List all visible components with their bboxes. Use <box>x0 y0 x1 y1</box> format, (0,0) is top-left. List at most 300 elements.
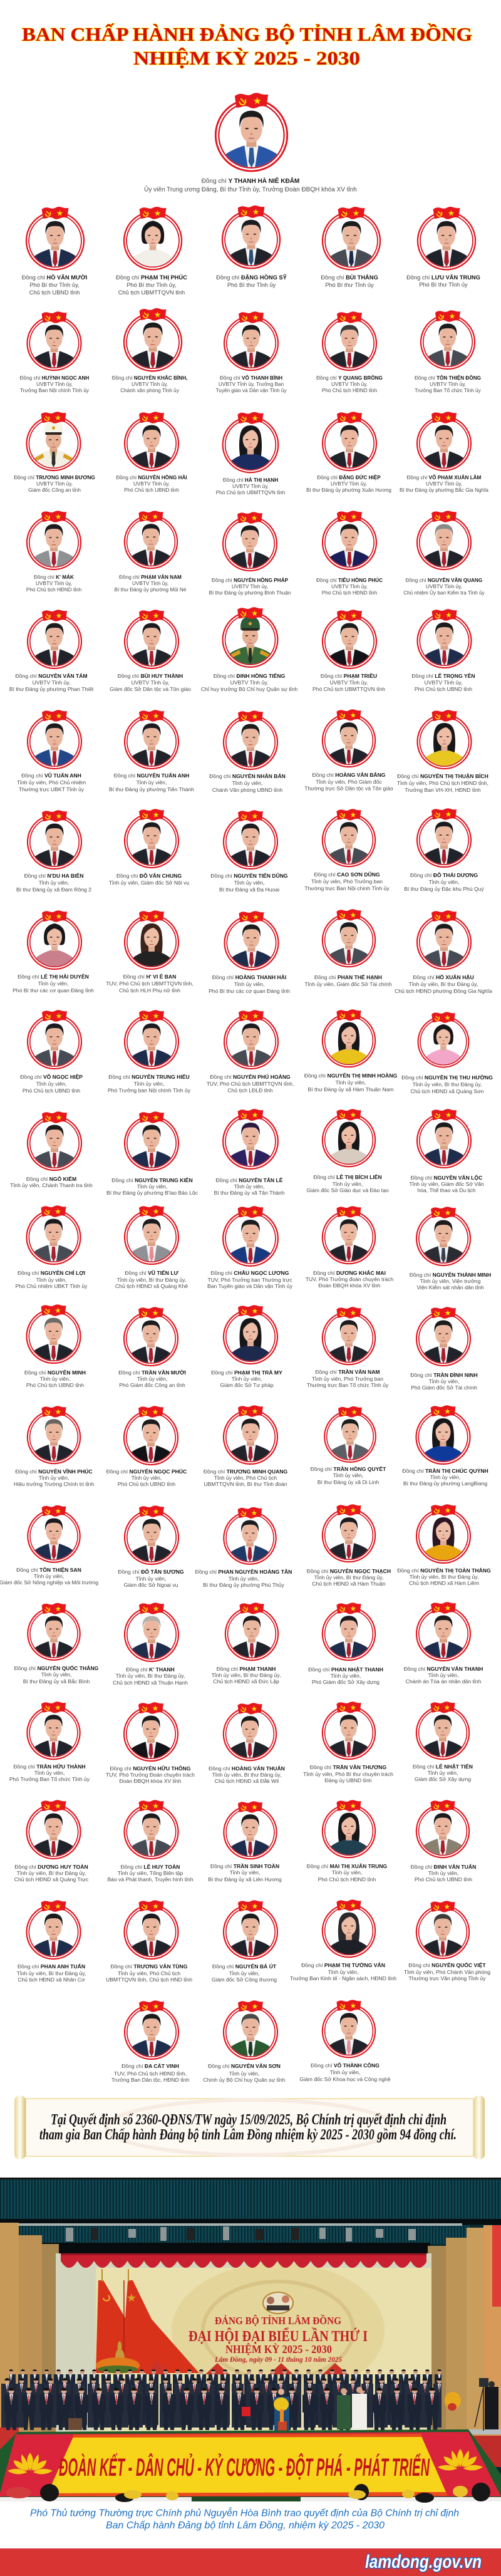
member: Đinh Văn Tuấn: Phó Chủ tịch UBND tỉnh <box>415 1876 472 1883</box>
member: Nguyễn Trung Kiên: Tỉnh ủy viên, <box>137 1183 167 1190</box>
member: Tiêu Hồng Phúc: UVBTV Tỉnh ủy, <box>331 584 368 589</box>
member: Tôn Thiện San: Tỉnh ủy viên, <box>34 1573 64 1579</box>
member: Lưu Văn Trung: Đồng chí LƯU VĂN TRUNG <box>406 274 480 281</box>
member: Võ Thành Công: Tỉnh ủy viên, <box>330 2069 360 2075</box>
member: K' Mák: UVBTV Tỉnh ủy, <box>36 581 72 586</box>
member: Phan Anh Tuấn: Đồng chí PHAN ANH TUẤN <box>18 1963 85 1970</box>
member: Nguyễn Hồng Pháp: Đồng chí NGUYỄN HỒNG PHÁP <box>212 578 288 583</box>
member: Lưu Văn Trung <box>406 207 480 288</box>
member: Dương Khắc Mai: Đồng chí DƯƠNG KHẮC MAI <box>313 1270 386 1276</box>
member: Nguyễn Ngọc Phúc: Tỉnh ủy viên, <box>132 1475 162 1481</box>
member: Nguyễn Chí Lợi: Đồng chí NGUYỄN CHÍ LỢI <box>18 1270 85 1276</box>
member: Cao Sơn Dũng: Đồng chí CAO SƠN DŨNG <box>314 871 380 878</box>
member: Nguyễn Văn Sơn <box>204 2000 286 2083</box>
member: Đỗ Thái Dương: Bí thư Đảng ủy Đặc khu Phú Quý <box>404 886 484 892</box>
member: K' Thanh <box>113 1602 188 1686</box>
member: Võ Thanh Bình: Đồng chí VÕ THANH BÌNH <box>220 375 282 381</box>
member: Nguyễn Hồng Pháp: UVBTV Tỉnh ủy, <box>232 584 268 589</box>
member: Nguyễn Thành Minh: Đồng chí NGUYỄN THÀNH MINH <box>410 1272 491 1278</box>
member: Võ Phạm Xuân Lâm: Đồng chí VÕ PHẠM XUÂN LÂM <box>407 475 481 480</box>
member: Nguyễn Bá Út: Tỉnh ủy viên, <box>229 1970 259 1976</box>
member: Hồ Xuân Hậu <box>395 910 492 994</box>
member: Hồ Văn Mười: Đồng chí HỒ VĂN MƯỜI <box>22 274 87 281</box>
member: Dương Huy Toàn <box>14 1800 89 1883</box>
member: Võ Ngọc Hiệp: Tỉnh ủy viên, <box>36 1081 66 1087</box>
member: Phạm Triều: UVBTV Tỉnh ủy, <box>330 679 368 685</box>
member: Nguyễn Văn Quang <box>403 511 485 596</box>
row: members A <box>20 308 482 393</box>
member: Hồ Văn Mười <box>22 207 87 296</box>
member: Nguyễn Trung Hiếu: Phó Trưởng ban Nội chính Tỉnh ủy <box>108 1088 191 1094</box>
member: Nguyễn Trung Hiếu: Tỉnh ủy viên, <box>134 1081 164 1087</box>
emblem: Marx Lenin portrait <box>263 2292 293 2314</box>
member: Nguyễn Minh: Đồng chí NGUYỄN MINH <box>24 1369 86 1376</box>
member: Nguyễn Văn Tám: Đồng chí NGUYỄN VĂN TÁM <box>15 673 88 679</box>
member: Phan Nhật Thanh: Phó Giám đốc Sở Xây dựng <box>312 1679 380 1685</box>
member: Ngô Kiểm <box>10 1111 93 1188</box>
member: Trần Sinh Toàn <box>208 1801 282 1883</box>
row: members L <box>14 1405 488 1487</box>
bust and flowers <box>96 2341 140 2374</box>
member: Trần Đình Ninh: Phó Giám đốc Sở Tài chính <box>411 1384 477 1391</box>
member: Tiêu Hồng Phúc <box>316 511 383 596</box>
member: Nguyễn Tuấn Anh <box>109 710 194 792</box>
member: Phan Anh Tuấn: Chủ tịch HĐND xã Nhân Cơ <box>18 1976 85 1983</box>
member: Y Quang Brông: Phó Chủ tịch HĐND tỉnh <box>322 388 378 393</box>
member: Phan Nhật Thanh: Tỉnh ủy viên, <box>331 1673 361 1679</box>
member: K' Mák <box>26 511 82 593</box>
member: Phan Thế Hạnh: Tỉnh ủy viên, Giám đốc Sở Tài chính <box>304 981 392 987</box>
member: K' Thanh: Đồng chí K' THANH <box>126 1666 175 1673</box>
member: Lê Thị Bích Liên: Tỉnh ủy viên, <box>333 1181 363 1187</box>
row: Phó Bí thư <box>22 205 480 296</box>
member: Võ Thành Công <box>299 2000 391 2082</box>
member: Nguyễn Thị Minh Hoàng: Đồng chí NGUYỄN THỊ MINH HOÀNG <box>304 1072 397 1079</box>
member: Đỗ Tấn Sương: Đồng chí ĐỖ TẤN SƯƠNG <box>118 1569 184 1575</box>
member: Nguyễn Hồng Pháp <box>209 512 291 596</box>
member: Trần Văn Nam: Đồng chí TRẦN VĂN NAM <box>315 1369 380 1375</box>
member: Nguyễn Phú Hoàng <box>207 1010 294 1094</box>
member: Trần Hữu Thành: Đồng chí TRẦN HỮU THÀNH <box>13 1763 86 1770</box>
member: Cao Sơn Dũng <box>304 809 390 891</box>
member: Bùi Huy Thành: UVBTV Tỉnh ủy, <box>132 679 169 685</box>
member: Phạm Văn Nam <box>115 511 187 593</box>
member: Nguyễn Ngọc Thạch: Chủ tịch HĐND xã Hàm Thuận <box>312 1581 386 1587</box>
member: Nguyễn Thị Thuận Bích <box>397 710 488 793</box>
row: members E <box>17 709 488 793</box>
member: N'Du Ha Biên: Tỉnh ủy viên, <box>39 880 69 886</box>
member: Nguyễn Thị Toàn Thắng: Chủ tịch HĐND xã Hàm Liêm <box>409 1580 479 1586</box>
member: Y Thanh Hà Niê Kđăm, Bí thư Tỉnh ủy <box>144 93 357 193</box>
member: Tiêu Hồng Phúc: Đồng chí TIÊU HỒNG PHÚC <box>316 578 383 583</box>
row: members G <box>13 909 492 994</box>
member: Y Quang Brông <box>316 311 383 393</box>
member: Lê Nhật Tiến <box>413 1701 473 1782</box>
member: Phạm Thị Trà My: Tỉnh ủy viên, <box>232 1376 262 1382</box>
member: Cao Sơn Dũng: Tỉnh ủy viên, Phó Trưởng ban <box>311 878 383 885</box>
member: Đinh Hồng Tiếng: Đồng chí ĐINH HỒNG TIẾNG <box>214 673 285 679</box>
member: Nguyễn Nhân Bản <box>209 710 286 793</box>
member: Nguyễn Thị Thu Hường: Đồng chí NGUYỄN THỊ THU HƯỜNG <box>401 1074 493 1081</box>
member: Nguyễn Hồng Hải <box>116 412 187 493</box>
member: Nguyễn Hồng Hải: UVBTV Tỉnh ủy, <box>133 481 170 487</box>
member: Vũ Tuấn Anh: Thường trực UBKT Tỉnh ủy <box>19 786 85 792</box>
member: Ngô Kiểm: Tỉnh ủy viên, Chánh Thanh tra tỉnh <box>10 1182 93 1188</box>
member: Lê Thị Hải Duyên: Đồng chí LÊ THỊ HẢI DUYÊN <box>18 974 89 980</box>
member: Tôn Thiện Đồng: Đồng chí TÔN THIỆN ĐỒNG <box>415 375 481 381</box>
member: Ngô Kiểm: Đồng chí NGÔ KIỂM <box>26 1176 76 1182</box>
member: Trương Minh Quang: Tỉnh ủy viên, Phó Chủ tịch <box>214 1475 277 1481</box>
member: Nguyễn Trung Kiên: Bí thư Đảng ủy phường B'lao Bảo Lộc <box>106 1190 199 1196</box>
member: Hoàng Văn Bằng: Thường trực Sở Dân tộc và Tôn giáo <box>304 786 393 792</box>
member: Nguyễn Vĩnh Phúc: Tỉnh ủy viên, <box>39 1475 69 1481</box>
member: Trần Văn Mười: Đồng chí TRẦN VĂN MƯỜI <box>118 1369 186 1376</box>
member: Nguyễn Quốc Việt: Tỉnh ủy viên, Phó Chánh Văn phòng <box>404 1969 490 1975</box>
member: Nguyễn Thị Thu Hường <box>401 1012 493 1094</box>
member: Nguyễn Bá Út: Giám đốc Sở Công thương <box>212 1976 277 1983</box>
member: Vũ Tuấn Anh <box>17 710 86 792</box>
row: members M <box>0 1504 491 1588</box>
member: Lê Thị Bích Liên <box>306 1109 389 1193</box>
member: Lê Huy Toàn: Đồng chí LÊ HUY TOÀN <box>121 1864 180 1870</box>
member: N'Du Ha Biên: Bí thư Đảng ủy xã Đam Rông 2 <box>16 886 91 893</box>
row: members I <box>10 1109 484 1196</box>
member: Nguyễn Hữu Thông: TUV, Phó Trưởng Đoàn chuyên trách <box>106 1772 195 1778</box>
member: Phạm Thị Phúc <box>116 207 187 296</box>
member: Trần Thị Chúc Quỳnh: Đồng chí TRẦN THỊ CHÚC QUỲNH <box>402 1468 488 1474</box>
member: Hồ Xuân Hậu: Tỉnh ủy viên, Bí thư Đảng ủy, <box>409 981 478 987</box>
member: Nguyễn Minh: Phó Chủ tịch UBND tỉnh <box>26 1382 84 1388</box>
member: Võ Phạm Xuân Lâm: Bí thư Đảng ủy phường Bắc Gia Nghĩa <box>400 487 488 493</box>
member: Tôn Thiện San <box>0 1505 98 1586</box>
member: Đặng Hồng Sỹ <box>216 205 287 288</box>
member: Đỗ Văn Chung: Đồng chí ĐỖ VĂN CHUNG <box>116 873 182 879</box>
member: Dương Huy Toàn: Đồng chí DƯƠNG HUY TOÀN <box>14 1864 88 1870</box>
member: Nguyễn Tuấn Anh: Bí thư Đảng ủy phường Tiến Thành <box>109 786 194 792</box>
member: Hoàng Văn Bằng: Tỉnh ủy viên, Phó Giám đốc <box>316 779 382 785</box>
member: Vũ Tuấn Anh: Tỉnh ủy viên, Phó Chủ nhiệm <box>17 779 86 786</box>
member: Nguyễn Văn Tám <box>9 610 94 692</box>
member: Trương Minh Quang: UBMTTQVN tỉnh, Bí thư Tỉnh đoàn <box>204 1481 287 1487</box>
member: Đặng Hồng Sỹ: Đồng chí ĐẶNG HỒNG SỸ <box>216 274 287 281</box>
member: Trần Đình Ninh: Tỉnh ủy viên, <box>429 1378 459 1384</box>
flower bank <box>0 2429 501 2496</box>
member: Đỗ Văn Chung: Tỉnh ủy viên, Giám đốc Sở Nội vụ <box>109 880 189 886</box>
member: Nguyễn Thị Minh Hoàng: Tỉnh ủy viên, <box>336 1079 366 1086</box>
member: Nguyễn Minh: Tỉnh ủy viên, <box>40 1376 70 1382</box>
icon: lotus right <box>438 2449 483 2470</box>
member: Trần Văn Mười <box>118 1307 186 1388</box>
member: Nguyễn Văn Thanh: Tỉnh ủy viên, <box>428 1672 458 1678</box>
member: Nguyễn Trung Kiên <box>106 1111 199 1196</box>
member: Đinh Văn Tuấn <box>411 1800 476 1883</box>
member: Nguyễn Văn Tám: Bí thư Đảng ủy phường Phan Thiết <box>9 686 94 692</box>
cameraman <box>475 2378 498 2431</box>
member: Trương Minh Đương <box>14 412 95 493</box>
right flowers <box>445 2392 461 2411</box>
member: Nguyễn Hồng Hải: Đồng chí NGUYỄN HỒNG HẢI <box>116 475 187 480</box>
member: Phạm Thanh: Đồng chí PHẠM THANH <box>217 1666 276 1672</box>
member: Nguyễn Thị Thuận Bích: Trưởng Ban VH-XH, HĐND tỉnh <box>405 787 481 793</box>
member: Lê Trọng Yên <box>411 609 475 692</box>
member: Nguyễn Văn Lộc <box>409 1109 484 1193</box>
member: Phạm Văn Nam: Đồng chí PHẠM VĂN NAM <box>119 574 182 580</box>
member: H' Vi Ê Ban: Chủ tịch HLH Phụ nữ tỉnh <box>119 987 180 994</box>
member: Lê Thị Bích Liên: Đồng chí LÊ THỊ BÍCH LIÊN <box>313 1174 382 1180</box>
member: Đỗ Tấn Sương: Tỉnh ủy viên, <box>136 1576 166 1582</box>
member: Y Quang Brông: UVBTV Tỉnh ủy, <box>331 382 368 387</box>
member: Nguyễn Thành Minh: Tỉnh ủy viên, Viện trưởng <box>420 1278 481 1284</box>
member: Nguyễn Thị Thuận Bích: Đồng chí NGUYỄN THỊ THUẬN BÍCH <box>397 773 488 779</box>
member: Đặng Đức Hiệp: Đồng chí ĐẶNG ĐỨC HIỆP <box>317 475 381 480</box>
member: Huỳnh Ngọc Anh: Trưởng Ban Nội chính Tỉnh ủy <box>20 388 90 393</box>
backdrop <box>56 2253 431 2435</box>
member: Võ Phạm Xuân Lâm <box>400 412 488 493</box>
member: Tôn Thiện Đồng: Trưởng Ban Tổ chức Tỉnh ủy <box>415 387 482 393</box>
backdrop title text <box>189 2314 368 2364</box>
member: Nguyễn Quốc Thắng <box>14 1603 99 1685</box>
presidium tables <box>0 2483 501 2503</box>
member: Nguyễn Chí Lợi: Tỉnh ủy viên, <box>36 1277 66 1283</box>
member: Trần Thị Chúc Quỳnh: Bí thư Đảng ủy phường LangBiang <box>403 1480 487 1487</box>
member: Hoàng Văn Thuấn <box>209 1703 285 1784</box>
member: Nguyễn Phú Hoàng: Đồng chí NGUYỄN PHÚ HOÀNG <box>210 1074 291 1080</box>
member: Hồ Xuân Hậu: Đồng chí HỒ XUÂN HẬU <box>413 974 474 980</box>
member: Mai Thị Xuân Trung <box>307 1800 388 1883</box>
member: Huỳnh Ngọc Anh <box>20 311 90 393</box>
member: Tôn Thiện San: Đồng chí TÔN THIỆN SAN <box>16 1567 81 1573</box>
member: Trần Văn Nam: Tỉnh ủy viên, Phó Trưởng ban <box>312 1376 383 1382</box>
caption: Ban Chấp hành Đảng bộ tỉnh Lâm Đồng, nhiệm kỳ 2025 - 2030 <box>106 2520 385 2531</box>
member: Trương Minh Đương: Đồng chí TRƯƠNG MINH ĐƯƠNG <box>14 475 95 480</box>
crowd <box>0 2369 498 2432</box>
member: Nguyễn Quốc Thắng: Bí thư Đảng ủy xã Bắc Bình <box>23 1678 90 1685</box>
member: Dương Huy Toàn: Chủ tịch HĐND xã Quảng Trực <box>14 1876 89 1883</box>
member: Bùi Huy Thành <box>110 610 191 692</box>
member: Bùi Thắng: Đồng chí BÙI THẮNG <box>321 274 378 281</box>
member: Lê Huy Toàn: Tỉnh ủy viên, Tổng Biên tập <box>118 1870 183 1876</box>
member: Phan Nhật Thanh <box>308 1602 383 1685</box>
member: Nguyễn Văn Thanh: Đồng chí NGUYỄN VĂN THANH <box>404 1666 483 1672</box>
member: Hồ Văn Mười: Phó Bí thư Tỉnh ủy, <box>29 282 80 288</box>
row: members B <box>14 412 488 496</box>
member: Phạm Thanh: Chủ tịch HĐND xã Đức Lập <box>213 1678 279 1685</box>
member: Lê Thị Hải Duyên: Phó Bí thư các cơ quan Đảng tỉnh <box>13 987 94 994</box>
member: Võ Thành Công: Đồng chí VÕ THÀNH CÔNG <box>311 2062 380 2069</box>
member: Mai Thị Xuân Trung: Tỉnh ủy viên, <box>332 1869 362 1876</box>
member: Hoàng Văn Thuấn: Đồng chí HOÀNG VĂN THUẤN <box>209 1765 285 1772</box>
member: Châu Ngọc Lương: Đồng chí CHÂU NGỌC LƯƠNG <box>211 1270 289 1276</box>
member: Đinh Văn Tuấn: Tỉnh ủy viên, <box>428 1870 458 1876</box>
member: Nguyễn Nhân Bản: Chánh Văn phòng UBND tỉnh <box>212 787 282 793</box>
member: Phạm Thị Tường Vân: Đồng chí PHẠM THỊ TƯỜNG VÂN <box>301 1962 385 1968</box>
member: Nguyễn Khắc Bình: Đồng chí NGUYỄN KHẮC BÌNH, <box>112 375 187 381</box>
member: Nguyễn Quốc Việt <box>404 1901 490 1981</box>
member: Lê Huy Toàn: Báo và Phát thanh, Truyền hình tỉnh <box>107 1876 194 1883</box>
member: Hoàng Văn Bằng: Đồng chí HOÀNG VĂN BẰNG <box>312 772 386 778</box>
member: Nguyễn Bá Út <box>212 1900 277 1983</box>
icon: lotus left <box>8 2453 53 2474</box>
member: Hoàng Thanh Hải: Phó Bí thư các cơ quan Đảng tỉnh <box>209 988 290 994</box>
member: Trương Minh Quang <box>204 1405 287 1487</box>
member: Lê Thị Hải Duyên <box>13 910 94 994</box>
member: Nguyễn Thị Thu Hường: Chủ tịch HĐND xã Quảng Sơn <box>411 1088 484 1094</box>
member: Đinh Văn Tuấn: Đồng chí ĐINH VĂN TUẤN <box>411 1864 476 1870</box>
member: Nguyễn Tiến Dũng <box>210 810 288 893</box>
backdrop title text: NHIỆM KỲ 2025 - 2030 <box>225 2342 332 2355</box>
member: Đa Cát Vinh: TUV, Phó Chủ tịch HĐND tỉnh, <box>114 2070 187 2077</box>
member: Trần Sinh Toàn: Tỉnh ủy viên, <box>230 1869 260 1876</box>
member: Nguyễn Thị Minh Hoàng <box>304 1009 398 1093</box>
member: Trần Văn Mười: Tỉnh ủy viên, <box>137 1376 167 1382</box>
member: Phạm Triều: Phó Chủ tịch UBMTTQVN tỉnh <box>312 686 385 692</box>
member: Nguyễn Tiến Dũng: Đồng chí NGUYỄN TIẾN DŨNG <box>210 873 288 879</box>
figure: man in green uniform <box>337 2388 351 2429</box>
backdrop title text: ĐẠI HỘI ĐẠI BIỂU LẦN THỨ I <box>189 2328 368 2345</box>
member: Trương Văn Tùng: UBMTTQVN tỉnh, Chủ tịch HND tỉnh <box>106 1976 192 1983</box>
member: Trần Hồng Quyết <box>311 1406 386 1485</box>
member: Nguyễn Vĩnh Phúc <box>14 1406 94 1487</box>
member: Hà Thị Hạnh: UVBTV Tỉnh ủy, <box>232 484 269 489</box>
member: Nguyễn Vĩnh Phúc: Hiệu trưởng Trường Chính trị tỉnh <box>14 1481 94 1487</box>
member: Hoàng Văn Bằng <box>304 709 393 792</box>
member: Lê Trọng Yên: Đồng chí LÊ TRỌNG YÊN <box>411 673 475 679</box>
member: K' Thanh: Chủ tịch HĐND xã Thuận Hạnh <box>113 1680 188 1686</box>
member: Nguyễn Hồng Hải: Phó Chủ tịch UBND tỉnh <box>124 487 179 493</box>
member: Nguyễn Thị Thuận Bích: Tỉnh ủy viên, Phó Chủ tịch HĐND tỉnh, <box>397 780 488 786</box>
member: Bùi Huy Thành: Giám đốc Sở Dân tộc và Tôn giáo <box>110 686 191 692</box>
member: Nguyễn Khắc Bình: UVBTV Tỉnh ủy, <box>132 382 168 387</box>
member: Phạm Thị Phúc: Đồng chí PHẠM THỊ PHÚC <box>116 274 187 281</box>
member: Nguyễn Hồng Pháp: Bí thư Đảng ủy phường Bình Thuận <box>209 590 291 596</box>
member: Phan Nguyễn Hoàng Tân: Tỉnh ủy viên, <box>229 1576 259 1582</box>
member: Nguyễn Trung Hiếu <box>108 1010 191 1094</box>
member: Châu Ngọc Lương <box>207 1206 293 1289</box>
member: Đa Cát Vinh: Đồng chí ĐA CÁT VINH <box>121 2063 179 2069</box>
member: Nguyễn Tuấn Anh: Tỉnh ủy viên, <box>137 779 167 786</box>
member: Hoàng Thanh Hải <box>209 911 290 994</box>
member: Nguyễn Ngọc Thạch <box>307 1504 391 1587</box>
member: Phạm Thị Tường Vân: Trưởng Ban Kinh tế - Ngân sách, HĐND tỉnh <box>290 1975 396 1981</box>
row: members H <box>20 1009 493 1094</box>
member: Bùi Huy Thành: Đồng chí BÙI HUY THÀNH <box>118 673 183 679</box>
member: Nguyễn Hữu Thông <box>106 1702 195 1784</box>
member: Nguyễn Bá Út: Đồng chí NGUYỄN BÁ ÚT <box>212 1963 276 1970</box>
member: Trần Đình Ninh: Đồng chí TRẦN ĐÌNH NINH <box>410 1372 478 1378</box>
member: Nguyễn Ngọc Phúc: Đồng chí NGUYỄN NGỌC PHÚC <box>106 1468 187 1475</box>
member: Đinh Hồng Tiếng: Chỉ huy trưởng Bộ Chỉ huy Quân sự tỉnh <box>201 686 297 692</box>
red carpet <box>0 2428 19 2453</box>
member: Trương Minh Quang: Đồng chí TRƯƠNG MINH QUANG <box>204 1468 287 1475</box>
member: Nguyễn Tiến Dũng: Bí thư Đảng xã Đạ Huoai <box>219 886 279 893</box>
member: Huỳnh Ngọc Anh: UVBTV Tỉnh ủy, <box>36 382 73 387</box>
member: Nguyễn Ngọc Thạch: Tỉnh ủy viên, Bí thư Đảng ủy, <box>314 1574 383 1581</box>
member: Hoàng Thanh Hải: Đồng chí HOÀNG THANH HẢI <box>212 974 286 980</box>
row: members R <box>111 2000 391 2083</box>
member: K' Thanh: Tỉnh ủy viên, Bí thư Đảng ủy, <box>116 1673 185 1679</box>
icon: left roll <box>14 2096 26 2159</box>
member: Phan Nguyễn Hoàng Tân: Đồng chí PHAN NGUYỄN HOÀNG TÂN <box>195 1569 292 1575</box>
member: Nguyễn Khắc Bình <box>112 308 187 393</box>
member: Võ Thanh Bình <box>216 311 287 393</box>
member: Nguyễn Văn Sơn: Đồng chí NGUYỄN VĂN SƠN <box>208 2063 281 2069</box>
member: Võ Thanh Bình: UVBTV Tỉnh ủy, Trưởng Ban <box>219 382 284 387</box>
member: K' Mák: Đồng chí K' MÁK <box>34 574 74 580</box>
member: Vũ Tiến Lư: Chủ tịch HĐND xã Quảng Khê <box>115 1283 188 1289</box>
decorative diamonds <box>145 2360 348 2374</box>
member: Lê Nhật Tiến: Đồng chí LÊ NHẬT TIẾN <box>413 1763 473 1770</box>
member: Hà Thị Hạnh <box>216 412 286 496</box>
member: Nguyễn Văn Lộc: Đồng chí NGUYỄN VĂN LỘC <box>411 1175 482 1181</box>
member: Nguyễn Tấn Lê: Đồng chí NGUYỄN TẤN LÊ <box>216 1177 282 1183</box>
member: Hoàng Văn Thuấn: Chủ tịch HĐND xã Đắk Wil <box>215 1778 279 1784</box>
member: Phan Nguyễn Hoàng Tân: Bí thư Đảng ủy phường Phú Thủy <box>203 1582 285 1588</box>
member: Nguyễn Quốc Việt: Thường trực Văn phòng Tỉnh ủy <box>408 1975 486 1981</box>
member: Huỳnh Ngọc Anh: Đồng chí HUỲNH NGỌC ANH <box>20 375 89 381</box>
member: Nguyễn Trung Hiếu: Đồng chí NGUYỄN TRUNG HIẾU <box>108 1074 190 1080</box>
member: Lê Thị Hải Duyên: Tỉnh ủy viên, <box>38 980 68 987</box>
member: N'Du Ha Biên <box>16 810 91 893</box>
member: Lê Nhật Tiến: Giám đốc Sở Xây dựng <box>415 1776 471 1782</box>
member: Nguyễn Quốc Thắng: Đồng chí NGUYỄN QUỐC THẮNG <box>14 1665 98 1671</box>
member: Trần Hữu Thành <box>9 1701 90 1782</box>
member: Trần Văn Thương: Tỉnh ủy viên, Phó Bí thư chuyên trách <box>303 1771 393 1777</box>
member: Phạm Thị Tường Vân: Tỉnh ủy viên, <box>328 1969 358 1975</box>
member: Lê Trọng Yên: UVBTV Tỉnh ủy, <box>425 679 462 685</box>
member: Nguyễn Chí Lợi: Phó Chủ nhiệm UBKT Tỉnh ủy <box>16 1283 88 1289</box>
side wood panels <box>0 2223 19 2436</box>
member: Đa Cát Vinh: Trưởng Ban Dân tộc, HĐND tỉnh <box>111 2077 189 2083</box>
member: Nguyễn Thị Toàn Thắng <box>397 1504 491 1586</box>
member: Võ Ngọc Hiệp <box>20 1010 83 1094</box>
member: Nguyễn Văn Quang: Chủ nhiệm Ủy ban Kiểm tra Tỉnh ủy <box>403 589 485 596</box>
member: Cao Sơn Dũng: Thường trực Ban Nội chính Tỉnh ủy <box>304 885 390 891</box>
member: Lê Huy Toàn <box>107 1800 194 1883</box>
figure: woman with bouquet <box>274 2389 289 2432</box>
member: Nguyễn Nhân Bản: Tỉnh ủy viên, <box>232 780 262 786</box>
member: Vũ Tiến Lư: Tỉnh ủy viên, Bí thư Đảng ủy, <box>117 1277 186 1283</box>
member: Nguyễn Văn Sơn: Chính ủy Bộ Chỉ huy Quân sự tỉnh <box>204 2077 286 2083</box>
member: Trương Văn Tùng: Tỉnh ủy viên, Phó Chủ tịch <box>118 1970 180 1976</box>
member: Y Thanh Hà Niê Kđăm, Bí thư Tỉnh ủy: Ủy viên Trung ương Đảng, Bí thư Tỉnh ủy, Trưởng Đoàn ĐBQH khóa XV tỉnh <box>144 185 357 193</box>
member: Trần Văn Thương: Đảng ủy UBND tỉnh <box>324 1777 372 1784</box>
member: Nguyễn Tuấn Anh: Đồng chí NGUYỄN TUẤN ANH <box>114 772 189 779</box>
row: members K <box>24 1304 478 1391</box>
member: Lê Thị Bích Liên: Giám đốc Sở Giáo dục và Đào tạo <box>306 1187 389 1193</box>
member: Nguyễn Tấn Lê <box>214 1109 285 1196</box>
member: Trần Đình Ninh <box>410 1307 478 1391</box>
member: Trần Thị Chúc Quỳnh: Tỉnh ủy viên, <box>430 1474 460 1480</box>
member: Phan Anh Tuấn <box>17 1900 86 1983</box>
row: members C <box>26 511 485 596</box>
member: Lưu Văn Trung: Phó Bí thư Tỉnh ủy <box>419 281 468 288</box>
member: Tôn Thiện Đồng: UVBTV Tỉnh ủy, <box>430 382 466 387</box>
member: Nguyễn Ngọc Phúc: Phó Chủ tịch UBND tỉnh <box>118 1481 175 1487</box>
member: Nguyễn Văn Quang: Đồng chí NGUYỄN VĂN QUANG <box>406 578 482 583</box>
row: members O <box>9 1701 473 1784</box>
member: Vũ Tuấn Anh: Đồng chí VŨ TUẤN ANH <box>21 772 81 779</box>
member: Nguyễn Quốc Việt: Đồng chí NGUYỄN QUỐC VIỆT <box>408 1962 486 1968</box>
member: Châu Ngọc Lương: Ban Tuyên giáo và Dân vận Tỉnh ủy <box>207 1283 293 1289</box>
member: Trương Văn Tùng: Đồng chí TRƯƠNG VĂN TÙNG <box>111 1963 187 1970</box>
member: Phan Thế Hạnh <box>304 909 392 987</box>
member: Nguyễn Văn Sơn: Tỉnh ủy viên, <box>229 2070 259 2077</box>
member: Trần Văn Mười: Phó Giám đốc Công an tỉnh <box>119 1382 185 1388</box>
member: Phạm Triều: Đồng chí PHẠM TRIỀU <box>321 673 377 679</box>
row: members N <box>14 1602 483 1686</box>
member: Dương Huy Toàn: Tỉnh ủy viên, Bí thư Đảng ủy, <box>17 1870 86 1876</box>
member: Võ Ngọc Hiệp: Đồng chí VÕ NGỌC HIỆP <box>20 1074 83 1080</box>
